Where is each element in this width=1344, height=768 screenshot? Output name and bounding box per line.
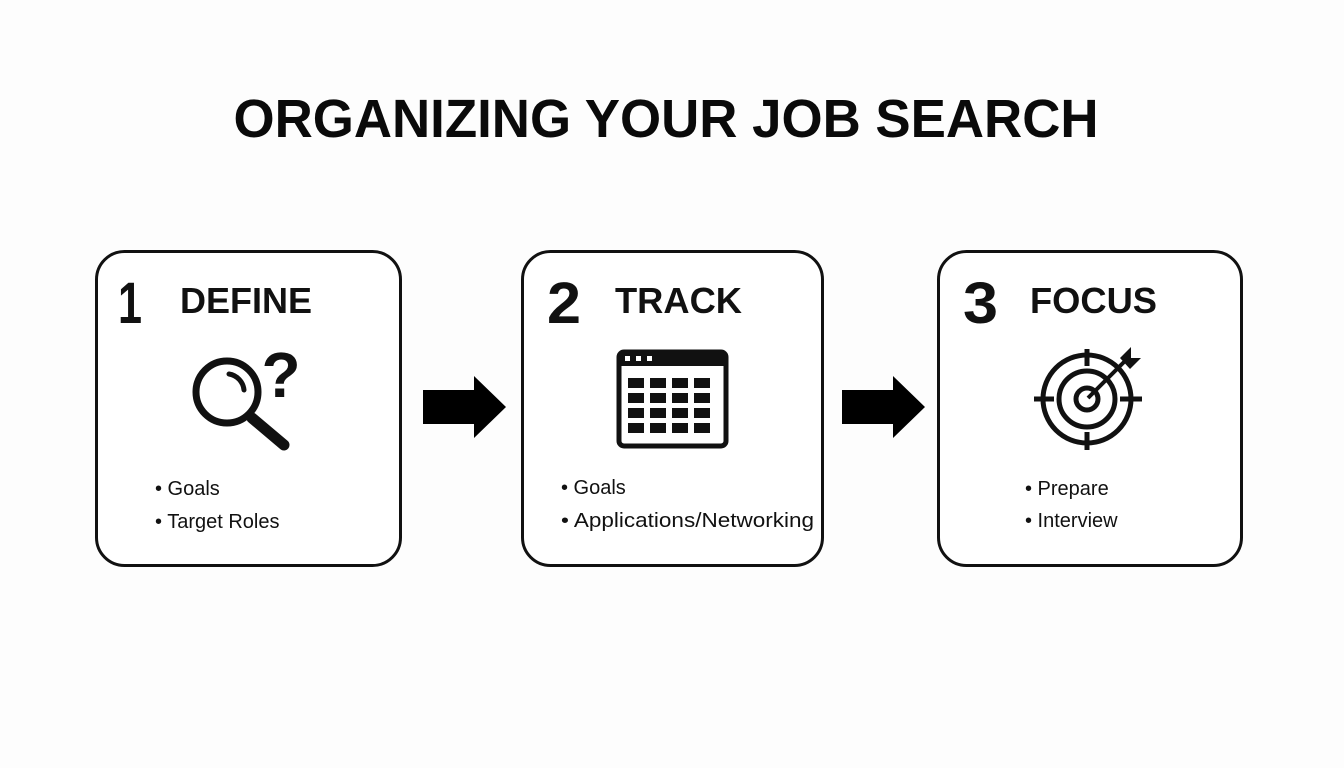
- step number 2: 2: [547, 271, 581, 336]
- bullets: • Target Roles: [155, 511, 279, 533]
- bullets: • Interview: [1025, 510, 1118, 532]
- bullets: [561, 477, 814, 532]
- arrow 2: [842, 376, 925, 438]
- bullets: • Goals: [561, 477, 626, 499]
- heading: focus: FOCUS: [1030, 280, 1157, 321]
- bullets: • Goals: [155, 478, 220, 500]
- bullets: [155, 478, 279, 533]
- icon: spreadsheet calendar: [619, 352, 726, 446]
- heading: track: TRACK: [615, 280, 742, 321]
- step number 3: 3: [963, 271, 998, 336]
- panel: focus: [938, 252, 1242, 566]
- icon: magnifier with question mark: [196, 339, 301, 445]
- bullets: • Applications/Networking: [561, 510, 814, 532]
- bullets: [1025, 478, 1118, 532]
- bullets: • Prepare: [1025, 478, 1109, 500]
- arrow 1: [423, 376, 506, 438]
- title: ORGANIZING YOUR JOB SEARCH: [234, 89, 1098, 149]
- panel: define: [96, 252, 400, 566]
- heading: define: DEFINE: [180, 280, 312, 321]
- icon: target with arrow: [1034, 347, 1142, 450]
- step number 1: 1: [118, 271, 142, 336]
- icon: magnifier with question mark: ?: [261, 339, 301, 411]
- panel: track: [522, 252, 822, 566]
